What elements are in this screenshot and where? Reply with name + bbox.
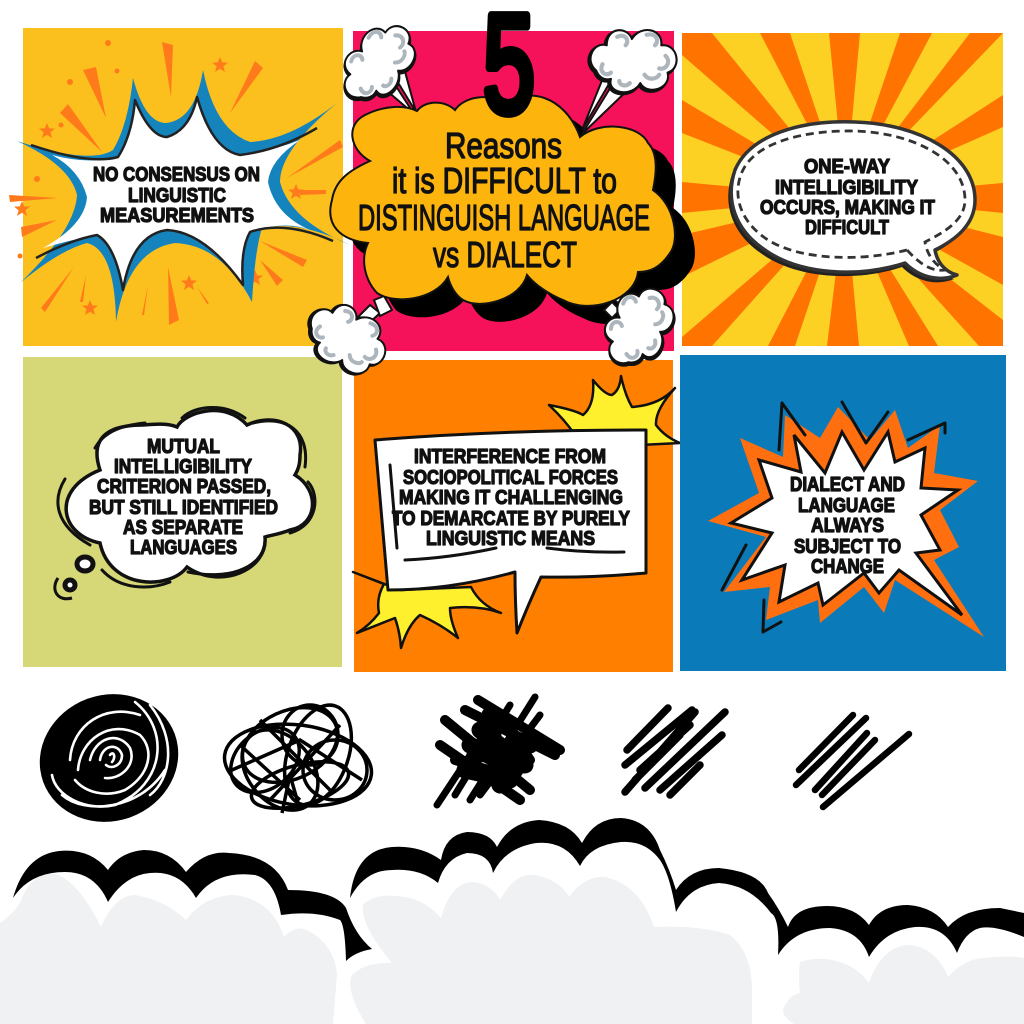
text: one-way: OCCURS, MAKING IT [760, 197, 935, 219]
text: mutual intelligibility [89, 436, 278, 559]
text: subject to change: CHANGE [811, 556, 884, 578]
text: no consensus: MEASUREMENTS [100, 205, 254, 227]
text: one-way: INTELLIGIBILITY [775, 177, 919, 199]
text: subject to change [790, 474, 905, 578]
scribble: light hatch [796, 715, 909, 807]
panel: title background [353, 31, 674, 351]
text: sociopolitical forces [392, 446, 631, 550]
title explosion [295, 0, 695, 386]
text: no consensus: NO CONSENSUS ON [93, 164, 260, 186]
orange sunburst rays [682, 33, 1003, 346]
orange starburst [708, 407, 984, 637]
text: one-way [760, 156, 935, 239]
text: mutual intelligibility: AS SEPARATE [123, 517, 243, 539]
scribble: cross hatch [437, 697, 560, 805]
text: sociopolitical forces: TO DEMARCATE BY PURELY [392, 508, 631, 530]
panel: no consensus [9, 28, 350, 346]
text: mutual intelligibility: BUT STILL IDENTIFIED [89, 497, 278, 519]
text: sociopolitical forces: MAKING IT CHALLENGING [399, 487, 623, 509]
panel: one-way intelligibility [682, 33, 1003, 346]
marker strokes [390, 465, 624, 560]
bubble shadow [728, 126, 972, 282]
text: one-way: ONE-WAY [804, 156, 891, 178]
panel: subject to change [680, 355, 1006, 671]
title text: DISTINGUISH LANGUAGE [358, 197, 650, 238]
title text: vs DIALECT [433, 234, 577, 275]
thought dots [55, 557, 93, 599]
grey cloud left [0, 873, 337, 1024]
cloud shadow [350, 114, 695, 324]
scribble: tangle [218, 693, 377, 825]
dashed inner line [738, 131, 965, 270]
text: one-way: DIFFICULT [805, 217, 889, 239]
text: no consensus [93, 164, 260, 227]
smoke trails [357, 68, 634, 326]
smoke clouds [295, 12, 686, 386]
title text: Reasons [445, 125, 562, 166]
text: mutual intelligibility: MUTUAL [147, 436, 220, 458]
panel: mutual intelligibility [23, 357, 342, 667]
text: mutual intelligibility: LANGUAGES [130, 537, 237, 559]
black cloud edge left [13, 850, 372, 961]
black cloud edge middle [350, 818, 1024, 957]
panel: sociopolitical forces [353, 360, 680, 672]
white starburst [43, 97, 310, 290]
scribble: spiral [22, 675, 196, 841]
blue starburst [17, 70, 350, 322]
outer cloud accents [58, 407, 315, 587]
yellow star bottom [353, 572, 501, 648]
black accent strokes [722, 402, 945, 632]
text: subject to change: SUBJECT TO [794, 536, 901, 558]
speech box [375, 430, 646, 633]
white starburst [731, 432, 962, 615]
grey cloud middle [350, 875, 752, 1024]
text: sociopolitical forces: INTERFERENCE FROM [414, 446, 606, 468]
text: sociopolitical forces: LINGUISTIC MEANS [426, 528, 595, 550]
orange burst lines [9, 40, 343, 325]
text: mutual intelligibility: CRITERION PASSED, [97, 476, 271, 498]
yellow star top [549, 376, 680, 445]
text: sociopolitical forces: SOCIOPOLITICAL FORCES [403, 467, 618, 489]
text: mutual intelligibility: INTELLIGIBILITY [114, 456, 253, 478]
speech bubble [731, 122, 975, 278]
yellow cloud [330, 96, 675, 306]
title text [358, 125, 650, 275]
grey cloud right [783, 945, 1024, 1024]
title text: it is DIFFICULT to [392, 160, 617, 201]
text: subject to change: LANGUAGE [798, 495, 895, 517]
text: no consensus: LINGUISTIC [128, 185, 226, 207]
text: subject to change: DIALECT AND [790, 474, 905, 496]
thought cloud [66, 411, 312, 582]
scribble: dense hatch [625, 708, 725, 795]
text: subject to change: ALWAYS [811, 515, 884, 537]
star ink outline [31, 97, 333, 290]
